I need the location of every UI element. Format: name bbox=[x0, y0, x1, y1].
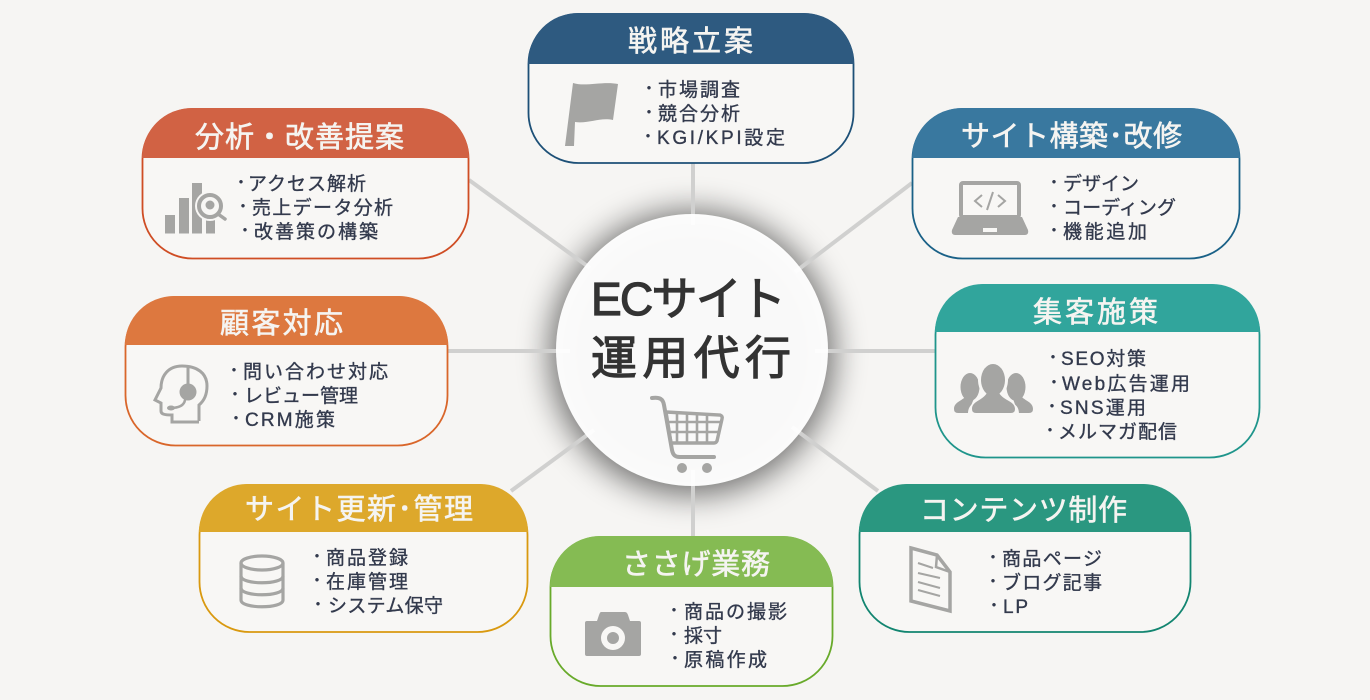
task list: ･ bbox=[314, 595, 322, 615]
panel: サイト更新・管理 bbox=[199, 484, 528, 632]
task list: 競合分析 bbox=[658, 103, 740, 125]
task list: ･ bbox=[1048, 348, 1058, 368]
hub shadow bbox=[550, 211, 834, 495]
heading: サイト更新･管理 bbox=[245, 493, 473, 526]
task list: ･ bbox=[1048, 397, 1056, 417]
task list: ･ bbox=[644, 127, 652, 147]
task list: ･ bbox=[240, 221, 250, 241]
task list: ･ bbox=[230, 385, 240, 405]
task list: 市場調査 bbox=[658, 79, 740, 101]
task list: SNS運用 bbox=[1060, 397, 1146, 419]
task list: ブログ記事 bbox=[1002, 571, 1102, 594]
task list: ･ bbox=[1050, 173, 1058, 193]
hub disc bbox=[556, 214, 828, 486]
panel body bbox=[200, 485, 528, 632]
panel body bbox=[126, 297, 448, 446]
task list: コーディング bbox=[1063, 197, 1176, 219]
task list: ･ bbox=[1050, 221, 1058, 241]
central hub bbox=[556, 214, 828, 486]
panel body bbox=[936, 285, 1260, 458]
task list: ･ bbox=[644, 103, 654, 123]
task list: SEO対策 bbox=[1061, 348, 1146, 370]
task list: ･ bbox=[988, 548, 998, 568]
task list: ･ bbox=[232, 409, 240, 429]
task list: デザイン bbox=[1063, 173, 1139, 195]
task list: LP bbox=[1003, 597, 1028, 618]
icon: headset operator bbox=[155, 366, 207, 422]
task list: 採寸 bbox=[684, 625, 722, 647]
task list bbox=[1050, 173, 1176, 243]
panel header bbox=[125, 296, 448, 345]
heading: 顧客対応 bbox=[220, 307, 343, 340]
task list: ･ bbox=[644, 79, 654, 99]
task list: 商品ページ bbox=[1002, 548, 1102, 570]
icon: group of people bbox=[954, 361, 1033, 414]
task list: 売上データ分析 bbox=[252, 197, 393, 219]
task list: ･ bbox=[988, 572, 998, 592]
task list: Web広告運用 bbox=[1062, 373, 1190, 395]
icon: bar chart with magnifier bbox=[165, 183, 225, 234]
task list: ･ bbox=[670, 625, 678, 645]
panel: 集客施策 bbox=[935, 284, 1260, 458]
icon: camera bbox=[585, 612, 641, 656]
panel header bbox=[528, 13, 854, 64]
icon: flag bbox=[565, 83, 618, 146]
heading: 戦略立案 bbox=[628, 25, 753, 58]
panel body bbox=[550, 537, 832, 686]
hub title bbox=[591, 273, 791, 384]
panel: 戦略立案 bbox=[528, 13, 854, 163]
task list bbox=[236, 173, 393, 243]
icon: laptop bbox=[952, 183, 1028, 235]
task list: ･ bbox=[670, 649, 680, 669]
task list: 原稿作成 bbox=[684, 649, 767, 671]
task list: ･ bbox=[990, 596, 998, 616]
panel header bbox=[550, 536, 833, 587]
task list: ･ bbox=[1050, 197, 1058, 217]
task list bbox=[1046, 348, 1190, 443]
panel header bbox=[199, 484, 528, 532]
task list bbox=[230, 361, 388, 431]
task list: 問い合わせ対応 bbox=[243, 361, 388, 383]
panel: 分析・改善提案 bbox=[142, 108, 469, 258]
hub title: ECサイト bbox=[591, 273, 786, 325]
heading: ささげ業務 bbox=[622, 548, 770, 581]
task list: アクセス解析 bbox=[248, 173, 366, 195]
task list: ･ bbox=[1050, 373, 1058, 393]
task list bbox=[312, 547, 443, 617]
panel: サイト構築・改修 bbox=[912, 108, 1240, 258]
panel body bbox=[860, 485, 1190, 632]
task list: KGI/KPI設定 bbox=[657, 127, 785, 149]
panel header bbox=[142, 108, 469, 158]
task list bbox=[644, 79, 785, 149]
panel header bbox=[912, 108, 1240, 158]
panel: ささげ業務 bbox=[550, 536, 833, 686]
task list: ･ bbox=[670, 601, 678, 621]
task list: レビュー管理 bbox=[244, 385, 358, 407]
panel body bbox=[912, 109, 1240, 258]
task list: ･ bbox=[312, 571, 322, 591]
hub title: 運用代行 bbox=[591, 332, 791, 384]
task list: システム保守 bbox=[328, 595, 443, 617]
panel header bbox=[935, 284, 1260, 332]
panel header bbox=[859, 484, 1191, 532]
heading: 分析・改善提案 bbox=[195, 121, 404, 154]
heading: サイト構築･改修 bbox=[961, 120, 1182, 153]
task list: ･ bbox=[312, 547, 322, 567]
task list: CRM施策 bbox=[245, 409, 335, 431]
connector lines bbox=[448, 163, 935, 536]
heading: コンテンツ制作 bbox=[920, 494, 1127, 527]
task list: ･ bbox=[1046, 421, 1054, 441]
task list: 商品登録 bbox=[326, 547, 408, 569]
panel: 顧客対応 bbox=[125, 296, 448, 446]
task list: 改善策の構築 bbox=[254, 221, 378, 243]
task list: 在庫管理 bbox=[326, 571, 408, 593]
task list: 商品の撮影 bbox=[684, 601, 787, 623]
icon: document bbox=[911, 548, 950, 611]
task list bbox=[670, 601, 787, 671]
task list: ･ bbox=[238, 197, 248, 217]
heading: 集客施策 bbox=[1033, 296, 1158, 329]
task list: ･ bbox=[236, 173, 246, 193]
icon: shopping cart bbox=[652, 398, 722, 473]
panel body bbox=[528, 14, 854, 163]
panel body bbox=[142, 109, 468, 258]
panel: コンテンツ制作 bbox=[859, 484, 1191, 632]
task list: ･ bbox=[230, 361, 238, 381]
task list: メルマガ配信 bbox=[1058, 421, 1177, 443]
icon: database bbox=[241, 556, 283, 607]
task list bbox=[988, 548, 1102, 618]
task list: 機能追加 bbox=[1063, 221, 1147, 243]
